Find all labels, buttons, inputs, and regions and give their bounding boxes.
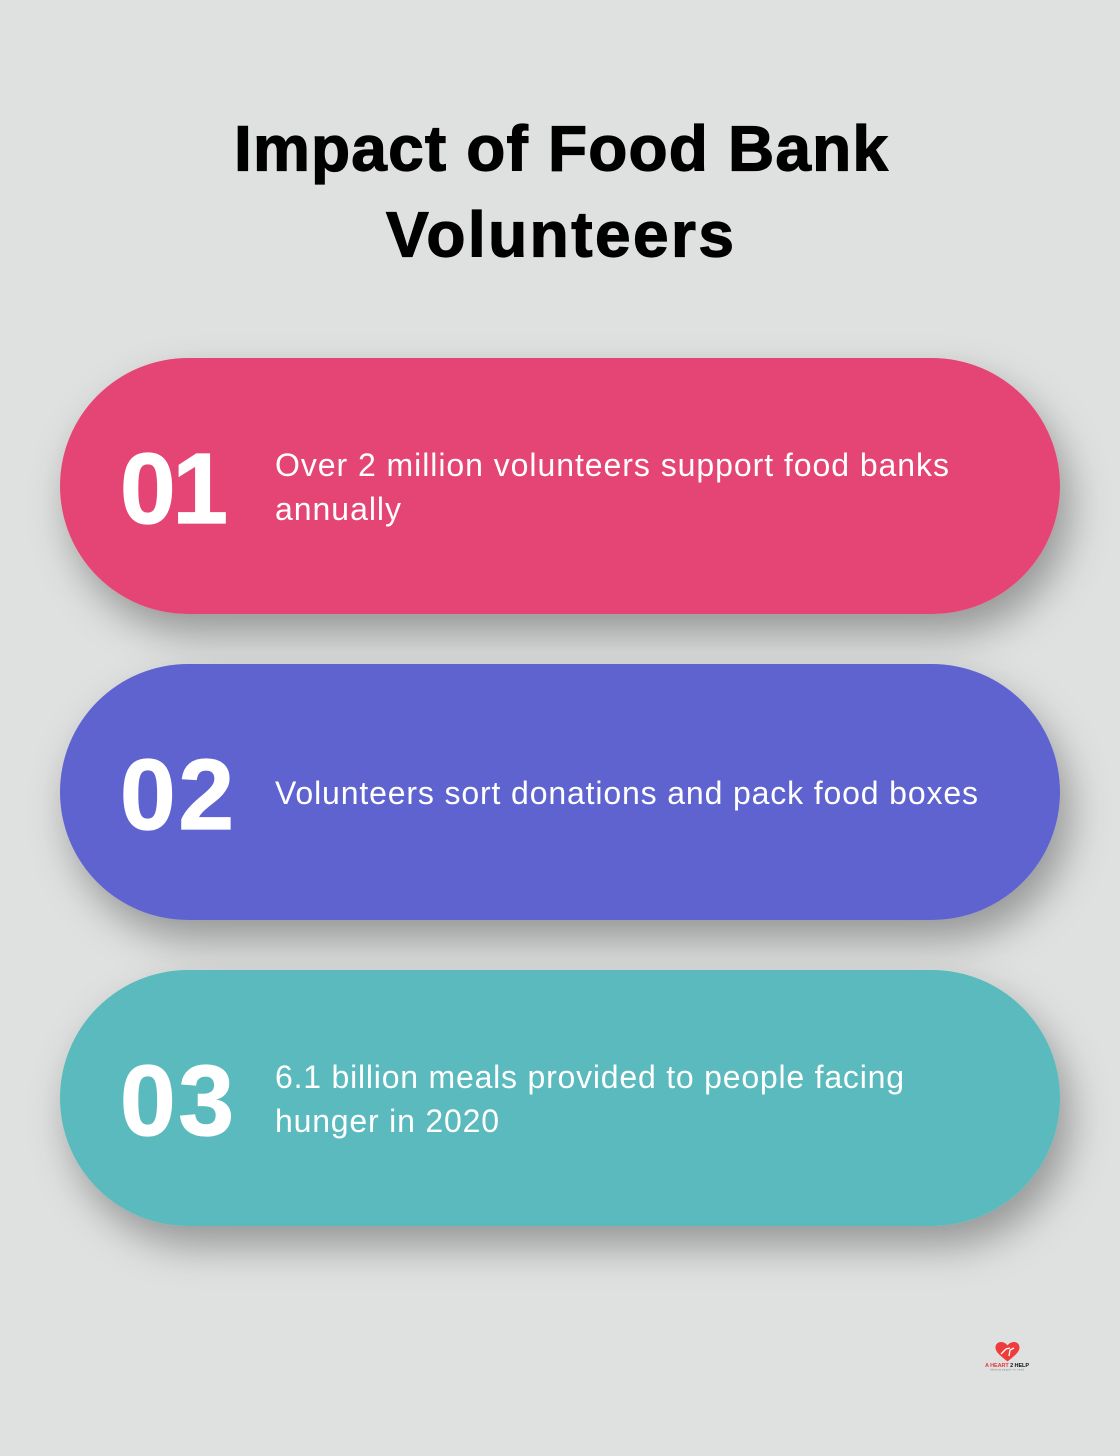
text: 6.1 billion meals: 6.1 billion meals provided to people facing	[275, 1059, 904, 1095]
text: over 2 million volunteers: Over 2 million volunteers support food banks	[275, 447, 949, 483]
logo: A Heart 2 Help	[985, 1342, 1029, 1372]
logo tagline: helping people in need	[990, 1368, 1025, 1372]
number 03: 03	[120, 1045, 234, 1157]
number 01: 01	[120, 433, 228, 545]
number 02: 02	[120, 739, 234, 851]
text: 6.1 billion meals	[275, 1059, 904, 1139]
title: Impact of Food Bank	[234, 112, 888, 184]
title	[234, 112, 888, 270]
icon: heart	[996, 1342, 1020, 1362]
panel: item 01	[60, 358, 1060, 614]
teal pill background	[60, 970, 1060, 1226]
text: sort donations: Volunteers sort donations and pack food boxes	[275, 775, 978, 811]
blue pill background	[60, 664, 1060, 920]
text: over 2 million volunteers	[275, 447, 949, 527]
pink pill background	[60, 358, 1060, 614]
logo wordmark: A HEART 2 HELP	[985, 1363, 1029, 1369]
text: 6.1 billion meals: hunger in 2020	[275, 1103, 499, 1139]
panel: item 03	[60, 970, 1060, 1226]
panel: item 02	[60, 664, 1060, 920]
title: Volunteers	[386, 198, 734, 270]
text: over 2 million volunteers: annually	[275, 491, 401, 527]
